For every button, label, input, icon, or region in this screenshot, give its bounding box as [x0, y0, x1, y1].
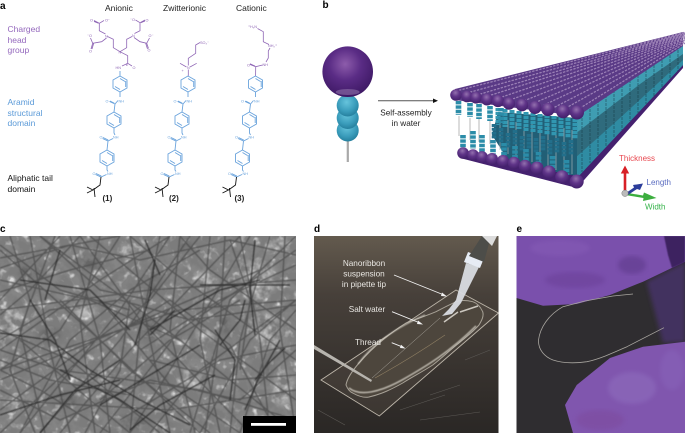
molecule 2 aramid and tail: O: [174, 100, 176, 104]
molecule 1 aramid and tail: [87, 71, 127, 197]
molecule 3 aramid and tail: O: [235, 136, 238, 140]
panel a: molecular structures: N: [105, 34, 108, 38]
label: charged head group: group: [8, 45, 30, 55]
molecule 2 aramid and tail: NH: [175, 172, 181, 176]
molecule 3 aramid and tail: NH: [248, 136, 254, 140]
side band dark core: [575, 44, 683, 180]
nanoribbon 3D bilayer: [450, 24, 685, 188]
thread: [538, 294, 664, 363]
arrow: self-assembly: [378, 98, 438, 103]
molecule 3 head group: [247, 25, 277, 76]
heading: Cationic: Cationic: [236, 3, 267, 13]
panel a: molecular structures: ⁻O: [87, 34, 92, 38]
panel a: molecular structures: O: [89, 50, 92, 54]
molecule 2 aramid and tail: O: [168, 136, 170, 140]
heading: Anionic: Anionic: [105, 3, 134, 13]
molecule 3 head group: O: [247, 64, 250, 68]
fibre mottling: [0, 236, 296, 433]
arrow: width: [625, 192, 656, 201]
label: charged head group: Charged: [8, 24, 40, 34]
label: aramid structural domain: Aramid: [8, 97, 35, 107]
panel a: molecular structures: HN: [116, 66, 121, 70]
arrow: salt water: [392, 312, 423, 324]
interior dark base: [492, 112, 577, 176]
callout text: thread: Thread: [355, 338, 381, 347]
callout text: nanoribbon suspension: Nanoribbon: [343, 259, 386, 268]
panel a: molecular structures: O: [105, 18, 108, 22]
label: width: Width: [645, 202, 665, 212]
interior stems: [500, 118, 572, 174]
molecule 3 aramid and tail: O: [228, 172, 231, 176]
panel label a: a: [0, 1, 6, 12]
water droplet: [346, 300, 483, 397]
compound number 1: (1): [102, 194, 113, 203]
molecule 3 head group: ⁺H₃N: [248, 25, 257, 29]
panel label e: e: [516, 224, 522, 235]
axes origin: [622, 190, 628, 196]
molecule 3 aramid and tail: NH: [254, 100, 260, 104]
molecule 2 aramid and tail: O: [160, 172, 164, 176]
heading: Zwitterionic: Zwitterionic: [163, 3, 207, 13]
molecule 2 aramid and tail: NH: [181, 136, 187, 140]
panel a: molecular structures: −: [108, 18, 110, 22]
panel a: molecular structures: N: [132, 34, 135, 38]
panel a: molecular structures: O⁻: [148, 34, 153, 38]
bottom glove finger: [565, 342, 685, 433]
top purple surface: [455, 32, 683, 116]
molecule 2 head group: SO₃⁻: [200, 41, 209, 45]
molecule 1 head group: [90, 20, 150, 66]
panel a: molecular structures: O: [148, 48, 150, 52]
glass slide: [321, 290, 498, 416]
panel d: photograph of slide with pipette: [314, 236, 498, 433]
axes triad: [619, 154, 671, 212]
bottom layer side: [460, 62, 683, 188]
molecule 1 aramid and tail: NH: [118, 100, 124, 104]
side upper teal beads: [575, 45, 683, 134]
callout text: nanoribbon suspension: in pipette tip: [342, 280, 387, 289]
molecule 3 aramid and tail: [222, 76, 262, 197]
pipette: [442, 236, 497, 316]
molecule 1 aramid and tail: NH: [107, 172, 113, 176]
front bottom teal columns: [463, 131, 566, 175]
label: aliphatic tail domain: Aliphatic tail: [8, 173, 53, 183]
panel a: molecular structures: O: [132, 66, 136, 70]
panel a: molecular structures: O: [90, 18, 93, 22]
molecule 1 aramid and tail: NH: [113, 136, 119, 140]
molecule 1 aramid and tail: O: [100, 136, 102, 140]
molecule 2 aramid and tail: [155, 76, 195, 197]
top glove finger: [516, 236, 685, 306]
compound number 2: (2): [169, 194, 179, 203]
label: aramid structural domain: domain: [8, 118, 36, 128]
molecule 1 aramid and tail: O: [106, 100, 108, 104]
arrow: nanoribbon: [394, 275, 447, 296]
molecule 1 aramid and tail: O: [92, 172, 96, 176]
icon: single amphiphile molecule: [322, 46, 373, 162]
label: aliphatic tail domain: domain: [8, 184, 36, 194]
panel label d: d: [314, 224, 320, 235]
panel e: photograph of thread held by gloved fingers: [516, 236, 685, 433]
panel a: molecular structures: [8, 3, 277, 203]
molecule 3 aramid and tail: NH: [242, 172, 248, 176]
panel c: micrograph of nanoribbons: [0, 236, 296, 433]
molecule 2 aramid and tail: NH: [186, 100, 192, 104]
panel label b: b: [322, 0, 329, 11]
label: thickness: Thickness: [619, 154, 655, 163]
label: self-assembly in water: Self-assembly: [380, 108, 433, 118]
compound number 3: (3): [234, 194, 245, 203]
front top spheres: [450, 89, 584, 120]
front stems: [459, 116, 490, 144]
molecule 2 head group: +: [182, 69, 184, 73]
arrow: length: [626, 184, 643, 195]
callout text: nanoribbon suspension: suspension: [343, 270, 385, 279]
molecule 3 aramid and tail: O: [241, 100, 244, 104]
front top teal columns: [458, 101, 501, 123]
label: length: Length: [646, 178, 671, 187]
interior lower beads back row: [494, 124, 571, 157]
molecule 2 head group: N: [187, 66, 190, 70]
panel a: molecular structures: ⁻O: [130, 18, 135, 22]
molecule 3 head group: NH: [262, 63, 268, 67]
panel a: molecular structures: N: [118, 50, 122, 54]
arrow: thread: [392, 343, 406, 348]
label: charged head group: head: [8, 35, 27, 45]
molecule 3 head group: NH₂⁺: [268, 44, 277, 48]
needle: [314, 345, 372, 382]
scale bar: [243, 416, 296, 433]
arrow: thickness: [621, 166, 629, 193]
molecule 2 head group: [180, 41, 209, 76]
callout text: salt water: Salt water: [349, 305, 385, 314]
label: self-assembly in water: in water: [392, 119, 421, 128]
panel label c: c: [0, 224, 6, 235]
label: aramid structural domain: structural: [8, 108, 43, 118]
panel a: molecular structures: O: [146, 18, 148, 22]
interior upper beads: [498, 108, 575, 139]
front bottom spheres: [457, 147, 584, 188]
